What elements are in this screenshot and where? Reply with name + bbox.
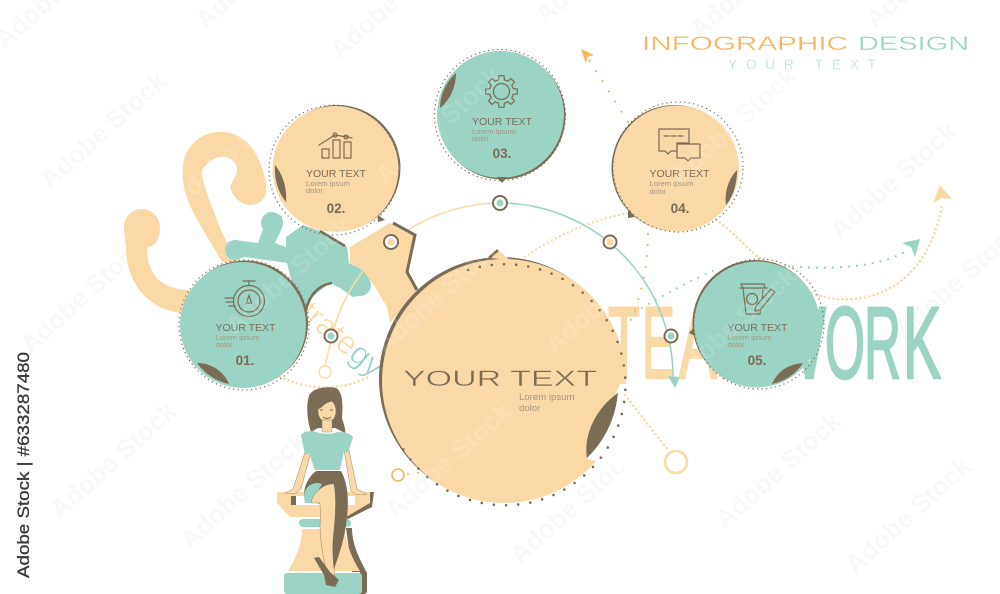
arrowheads — [581, 49, 952, 388]
title: INFOGRAPHIC — [642, 33, 848, 55]
background stock watermarks: Adobe Stock — [709, 405, 848, 534]
main circle notch — [587, 384, 640, 470]
inner skirt — [304, 483, 322, 503]
background stock watermarks: Adobe Stock — [174, 425, 313, 554]
label 01: YOUR TEXT — [216, 322, 276, 334]
dotted link to ring — [625, 395, 668, 450]
strategy word on curve: Strategy — [278, 280, 392, 384]
icon: gear — [486, 76, 517, 107]
face details — [320, 410, 333, 418]
background stock watermarks: Adobe Stock — [504, 440, 643, 569]
teamwork lettering: O — [825, 286, 865, 400]
title — [642, 33, 969, 72]
node 2 — [493, 196, 507, 210]
main circle — [379, 250, 640, 505]
fold 03 — [440, 73, 456, 108]
teamwork lettering: E — [642, 286, 675, 400]
background stock watermarks: Adobe Stock — [379, 395, 518, 524]
foreground stock watermarks: Adobe Stock — [219, 210, 358, 339]
label 03: 03. — [493, 146, 511, 161]
label 04: 04. — [671, 201, 689, 216]
main circle fold — [586, 393, 618, 458]
label 05 — [728, 322, 788, 368]
fold 04 — [726, 170, 737, 205]
brown arcs on splat — [305, 231, 345, 315]
foreground stock watermarks: Adobe Stock — [494, 105, 633, 234]
label 03: dolor — [472, 134, 489, 143]
pedestal — [277, 492, 374, 594]
node 4 — [664, 330, 678, 342]
hair — [307, 387, 345, 433]
centre arc peach and teal — [325, 203, 673, 378]
foreground stock watermarks: Adobe Stock — [379, 395, 518, 524]
node 5 — [324, 330, 338, 342]
circle 02 — [269, 105, 400, 235]
node 3 — [604, 236, 616, 248]
main circle text: Lorem ipsum — [519, 392, 574, 403]
tail 03 — [497, 177, 507, 183]
tail 05 — [689, 327, 695, 336]
label 02: dolor — [306, 186, 323, 195]
label 02 — [306, 168, 366, 216]
foreground stock watermarks: Adobe Stock — [369, 60, 508, 189]
label 03: Lorem ipsum — [472, 127, 516, 136]
foreground stock watermarks: Adobe Stock — [164, 85, 303, 214]
title: YOUR TEXT — [728, 57, 876, 72]
main circle text: dolor — [519, 403, 541, 414]
label 05: 05. — [748, 353, 766, 368]
main circle text — [403, 366, 597, 414]
background stock watermarks: Adobe Stock — [44, 395, 183, 524]
fold 01 — [197, 363, 229, 384]
circle 03 — [434, 50, 566, 183]
circle 05 — [689, 259, 824, 389]
main circle dots — [403, 264, 625, 505]
stock credit: Adobe Stock | #633287480 — [14, 352, 33, 578]
label 03 — [472, 116, 532, 161]
foreground stock watermarks — [164, 60, 803, 524]
sandals — [314, 557, 339, 587]
background stock watermarks: Adobe Stock — [34, 65, 173, 194]
label 04: dolor — [650, 187, 667, 196]
background stock watermarks: Adobe Stock — [664, 60, 803, 189]
teamwork lettering — [608, 286, 941, 400]
peach squiggles — [124, 132, 266, 313]
label 04 — [650, 168, 710, 216]
icon: bar chart — [319, 133, 352, 158]
teamwork lettering: W — [766, 286, 826, 400]
label 01: 01. — [236, 353, 254, 368]
fold 05 — [772, 363, 803, 384]
foreground stock watermarks: Adobe Stock — [664, 60, 803, 189]
label 05: YOUR TEXT — [728, 322, 788, 334]
label 04: YOUR TEXT — [650, 168, 710, 180]
background stock watermarks: Adobe Stock — [824, 115, 963, 244]
background stock watermarks: Adobe Stock — [839, 450, 978, 579]
icon: cup and pencil — [740, 284, 775, 314]
teamwork lettering: R — [864, 286, 901, 400]
teal splat shape — [225, 212, 371, 313]
label 01: dolor — [216, 340, 233, 349]
arms and face — [285, 400, 367, 495]
label 01: Lorem ipsum — [216, 333, 259, 342]
node 1 — [384, 235, 398, 249]
hair fringe — [317, 398, 336, 410]
foreground stock watermarks: Adobe Stock — [664, 260, 803, 389]
label 05: dolor — [728, 340, 745, 349]
shirt — [301, 431, 353, 470]
end rings — [319, 366, 687, 481]
label 03: YOUR TEXT — [472, 116, 532, 128]
peach key shape — [350, 223, 417, 323]
circle 01 — [179, 260, 309, 390]
teamwork lettering: A — [679, 286, 717, 400]
teamwork lettering: K — [903, 286, 941, 400]
circle 04 — [612, 102, 743, 232]
label 02: YOUR TEXT — [306, 168, 366, 180]
woman figure — [285, 387, 367, 587]
icon: stopwatch — [225, 281, 264, 316]
fold 02 — [275, 165, 286, 202]
background stock watermarks: Adobe Stock — [14, 230, 153, 359]
dotted connector paths — [280, 58, 942, 474]
label 05: Lorem ipsum — [728, 333, 771, 342]
title: DESIGN — [858, 33, 969, 55]
teamwork lettering: T — [608, 286, 640, 400]
tail 02 — [378, 215, 385, 222]
label 04: Lorem ipsum — [650, 179, 693, 188]
front leg — [311, 484, 336, 585]
icon: chat bubbles — [659, 129, 700, 161]
foreground stock watermarks: Adobe Stock — [369, 230, 508, 359]
teamwork lettering: M — [718, 286, 764, 400]
tail 04 — [628, 209, 635, 218]
main circle text: YOUR TEXT — [403, 366, 597, 391]
label 02: 02. — [327, 201, 345, 216]
label 01 — [216, 322, 276, 368]
foreground stock watermarks: Adobe Stock — [539, 230, 678, 359]
label 02: Lorem ipsum — [306, 179, 350, 188]
skirt — [304, 471, 348, 572]
